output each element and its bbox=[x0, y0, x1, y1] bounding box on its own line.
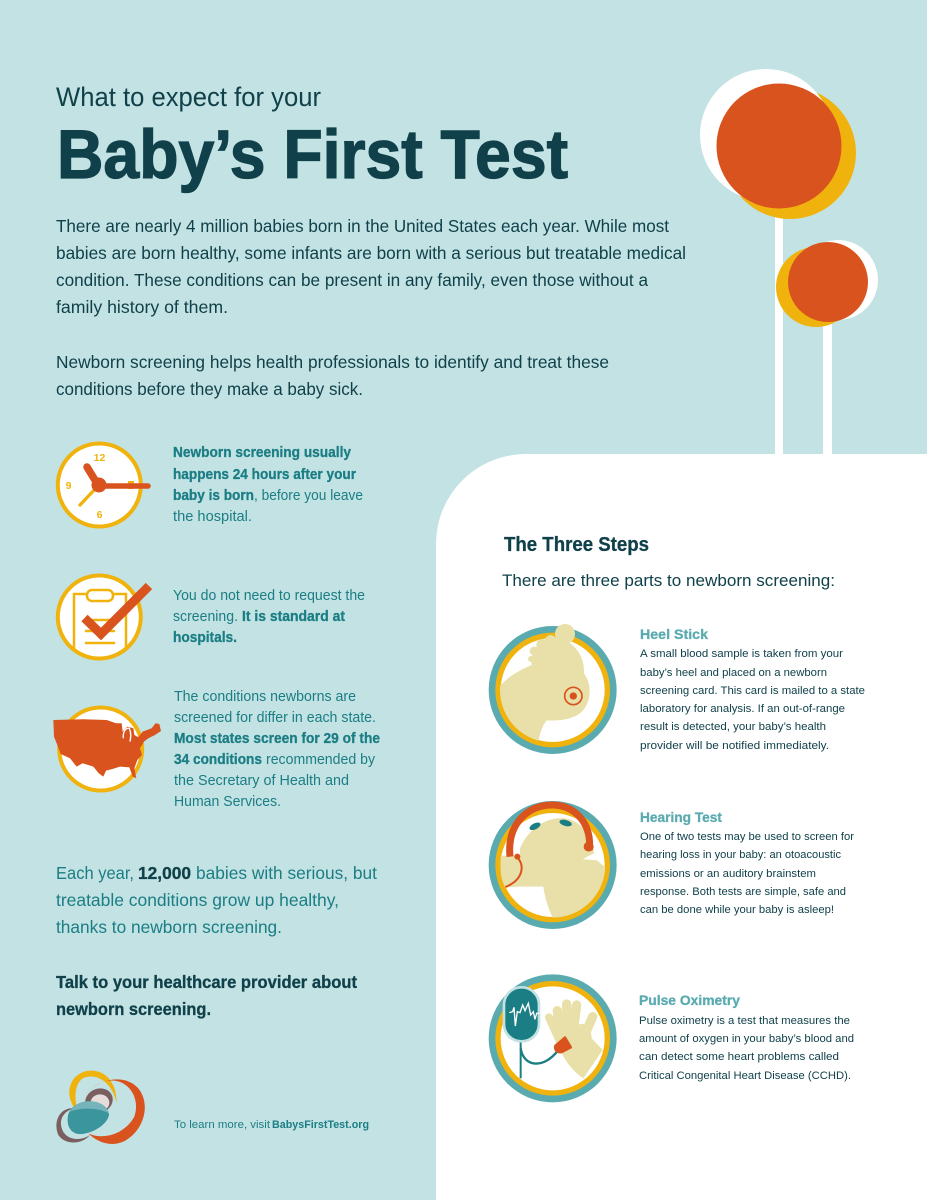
website link: To learn more, visit bbox=[174, 1119, 270, 1131]
text: when screening happens bbox=[173, 445, 363, 525]
text: heel stick: laboratory for analysis. If an out-of-range bbox=[640, 703, 845, 715]
subheading: There are three parts to newborn screening: bbox=[502, 572, 835, 590]
panel: the three steps background bbox=[436, 454, 927, 1200]
text: heel stick: baby’s heel and placed on a newborn bbox=[640, 667, 827, 679]
call to action: newborn screening. bbox=[56, 999, 211, 1019]
icon: clipboard check bbox=[58, 576, 149, 658]
icon: clock: 6 bbox=[97, 509, 103, 521]
icon: heel stick bbox=[489, 624, 617, 754]
logo bbox=[56, 1071, 145, 1144]
text: hearing test: emissions or an auditory brainstem bbox=[640, 868, 816, 880]
intro text: condition. These conditions can be present in any family, even those without a bbox=[56, 270, 648, 290]
text: when screening happens: baby is born bbox=[173, 488, 254, 504]
text: when screening happens: , before you leave bbox=[254, 488, 363, 504]
text: hearing test: hearing loss in your baby: an otoacoustic bbox=[640, 849, 842, 861]
text: conditions differ by state: The conditions newborns are bbox=[174, 689, 356, 705]
text: conditions differ by state: Human Services. bbox=[174, 794, 281, 810]
title bbox=[56, 82, 568, 193]
website link: BabysFirstTest.org bbox=[272, 1119, 369, 1131]
icon: US map bbox=[53, 708, 161, 790]
text: hearing test bbox=[640, 809, 854, 916]
text: screening is standard: hospitals. bbox=[173, 630, 237, 646]
title: Baby’s First Test bbox=[57, 116, 568, 193]
text: conditions differ by state: recommended by bbox=[266, 752, 376, 768]
icon: clock bbox=[58, 444, 148, 526]
text: hearing test: response. Both tests are simple, safe and bbox=[640, 886, 846, 898]
call to action bbox=[56, 972, 357, 1019]
intro text: family history of them. bbox=[56, 297, 228, 317]
text: 12,000 babies: Each year, bbox=[56, 863, 134, 883]
text: heel stick: result is detected, your baby’s health bbox=[640, 721, 826, 733]
icon: clock: 9 bbox=[66, 480, 72, 492]
intro text: Newborn screening helps health professionals to identify and treat these bbox=[56, 352, 609, 372]
text: 12,000 babies: thanks to newborn screening. bbox=[56, 917, 282, 937]
text: 12,000 babies: 12,000 bbox=[138, 863, 191, 883]
text: heel stick: provider will be notified immediately. bbox=[640, 740, 829, 752]
text: hearing test: Hearing Test bbox=[640, 809, 722, 825]
text: when screening happens: Newborn screening usually bbox=[173, 445, 351, 461]
text: pulse oximetry: amount of oxygen in your baby’s blood and bbox=[639, 1033, 854, 1045]
text: pulse oximetry bbox=[639, 992, 854, 1082]
text: heel stick: A small blood sample is taken from your bbox=[640, 648, 843, 660]
intro text bbox=[56, 216, 686, 399]
decorative balloons bbox=[700, 69, 878, 460]
text: conditions differ by state: screened for differ in each state. bbox=[174, 710, 376, 726]
intro text: babies are born healthy, some infants are born with a serious but treatable medical bbox=[56, 243, 686, 263]
text: pulse oximetry: Critical Congenital Heart Disease (CCHD). bbox=[639, 1070, 851, 1082]
title: What to expect for your bbox=[56, 82, 321, 112]
text: conditions differ by state: the Secretary of Health and bbox=[174, 773, 349, 789]
text: pulse oximetry: can detect some heart problems called bbox=[639, 1051, 839, 1063]
text: conditions differ by state bbox=[174, 689, 380, 810]
text: 12,000 babies: treatable conditions grow up healthy, bbox=[56, 890, 339, 910]
text: pulse oximetry: Pulse oximetry is a test that measures the bbox=[639, 1015, 850, 1027]
intro text: conditions before they make a baby sick. bbox=[56, 379, 363, 399]
text: screening is standard: It is standard at bbox=[242, 609, 345, 625]
icon: pulse oximetry bbox=[489, 974, 617, 1102]
icon: clock: 12 bbox=[94, 452, 105, 464]
text: heel stick: Heel Stick bbox=[640, 626, 708, 642]
heading: the three steps: The Three Steps bbox=[504, 534, 649, 556]
text: screening is standard: You do not need to request the bbox=[173, 588, 365, 604]
text: heel stick: screening card. This card is mailed to a state bbox=[640, 685, 865, 697]
text: screening is standard: screening. bbox=[173, 609, 238, 625]
call to action: Talk to your healthcare provider about bbox=[56, 972, 357, 992]
text: screening is standard bbox=[173, 588, 365, 646]
text: when screening happens: happens 24 hours after your bbox=[173, 467, 356, 483]
website link bbox=[174, 1119, 369, 1131]
text: hearing test: One of two tests may be used to screen for bbox=[640, 831, 854, 843]
text: 12,000 babies bbox=[56, 863, 377, 937]
text: 12,000 babies: babies with serious, but bbox=[196, 863, 377, 883]
text: when screening happens: the hospital. bbox=[173, 509, 252, 525]
intro text: There are nearly 4 million babies born in the United States each year. While most bbox=[56, 216, 669, 236]
text: heel stick bbox=[640, 626, 865, 752]
text: conditions differ by state: Most states screen for 29 of the bbox=[174, 731, 380, 747]
text: conditions differ by state: 34 conditions bbox=[174, 752, 262, 768]
icon: hearing test bbox=[489, 801, 617, 929]
text: hearing test: can be done while your baby is asleep! bbox=[640, 904, 834, 916]
text: pulse oximetry: Pulse Oximetry bbox=[639, 992, 740, 1008]
